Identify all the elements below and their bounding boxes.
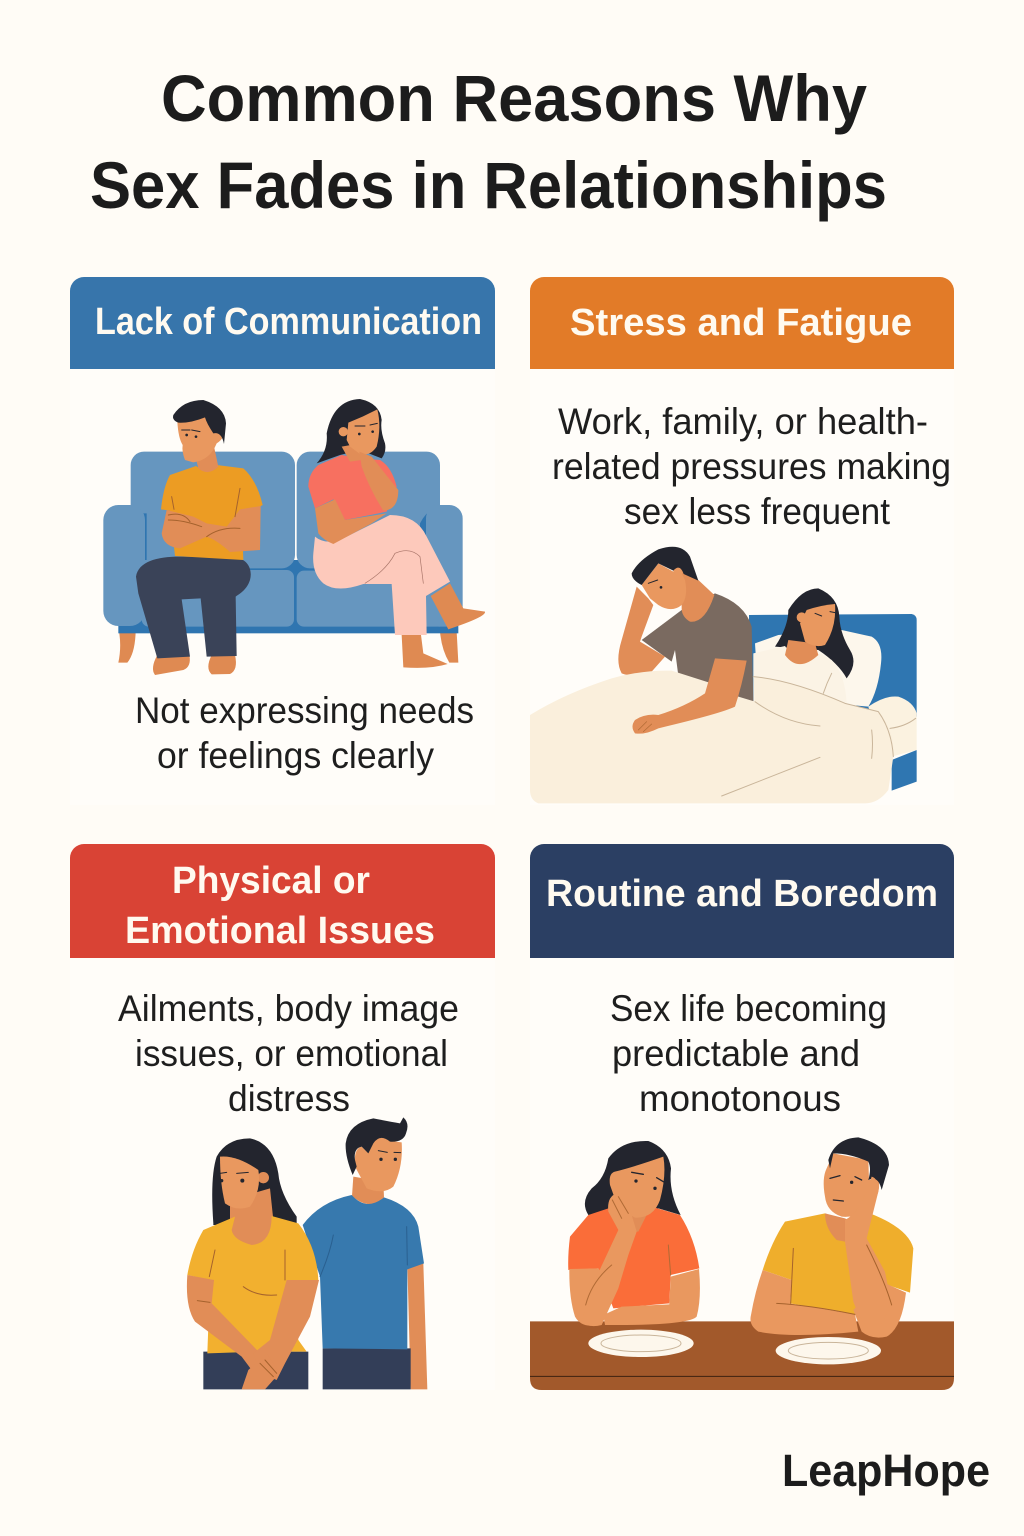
text: lack of communication description: or feelings clearly: [157, 735, 434, 776]
text: stress and fatigue description: Work, family, or health-: [558, 401, 928, 442]
text: physical or emotional description: Ailments, body image: [118, 988, 459, 1029]
header: physical or emotional issues: Physical or: [172, 860, 370, 902]
text: routine and boredom description: predictable and: [612, 1033, 860, 1074]
panel: routine and boredom: [530, 844, 954, 1390]
illustration: couple on sofa: [103, 399, 485, 675]
text: routine and boredom description: [610, 988, 887, 1119]
header: routine and boredom: [530, 844, 954, 958]
text: stress and fatigue description: [552, 401, 951, 532]
illustration: tired couple in bed: [530, 547, 917, 803]
panel: physical or emotional issues: [70, 844, 495, 1390]
text: lack of communication description: Not expressing needs: [135, 690, 474, 731]
header: routine and boredom: Routine and Boredom: [546, 873, 938, 915]
title: [90, 61, 887, 222]
text: physical or emotional description: [118, 988, 459, 1119]
blanket: [530, 671, 893, 803]
woman standing: [187, 1138, 319, 1389]
title: Sex Fades in Relationships: [90, 148, 887, 222]
panel: stress and fatigue: [530, 277, 954, 805]
text: stress and fatigue description: related pressures making: [552, 446, 951, 487]
illustration: couple standing: [187, 1117, 427, 1389]
man on sofa: [136, 400, 263, 675]
woman in bed: [753, 588, 853, 703]
header: stress and fatigue: Stress and Fatigue: [570, 302, 912, 344]
text: routine and boredom description: monotonous: [639, 1078, 841, 1119]
header: lack of communication: [70, 277, 495, 369]
header: physical or emotional issues: Emotional Issues: [125, 910, 435, 952]
text: lack of communication description: [135, 690, 474, 776]
woman on sofa: [308, 399, 485, 668]
text: physical or emotional description: issues, or emotional: [135, 1033, 448, 1074]
bored woman: [568, 1141, 700, 1326]
man in bed: [618, 547, 753, 702]
text: stress and fatigue description: sex less frequent: [624, 491, 891, 532]
header: physical or emotional issues: [70, 844, 495, 958]
text: routine and boredom description: Sex life becoming: [610, 988, 887, 1029]
text: physical or emotional description: distress: [228, 1078, 350, 1119]
panel: lack of communication: [70, 277, 495, 805]
illustration: bored couple at table: [530, 1137, 954, 1390]
man standing: [303, 1117, 427, 1389]
table: [530, 1321, 954, 1390]
header: lack of communication: Lack of Communication: [95, 301, 482, 343]
bored man: [750, 1137, 913, 1338]
header: stress and fatigue: [530, 277, 954, 369]
logo: LeapHope: LeapHope: [782, 1445, 990, 1496]
title: Common Reasons Why: [161, 61, 867, 135]
